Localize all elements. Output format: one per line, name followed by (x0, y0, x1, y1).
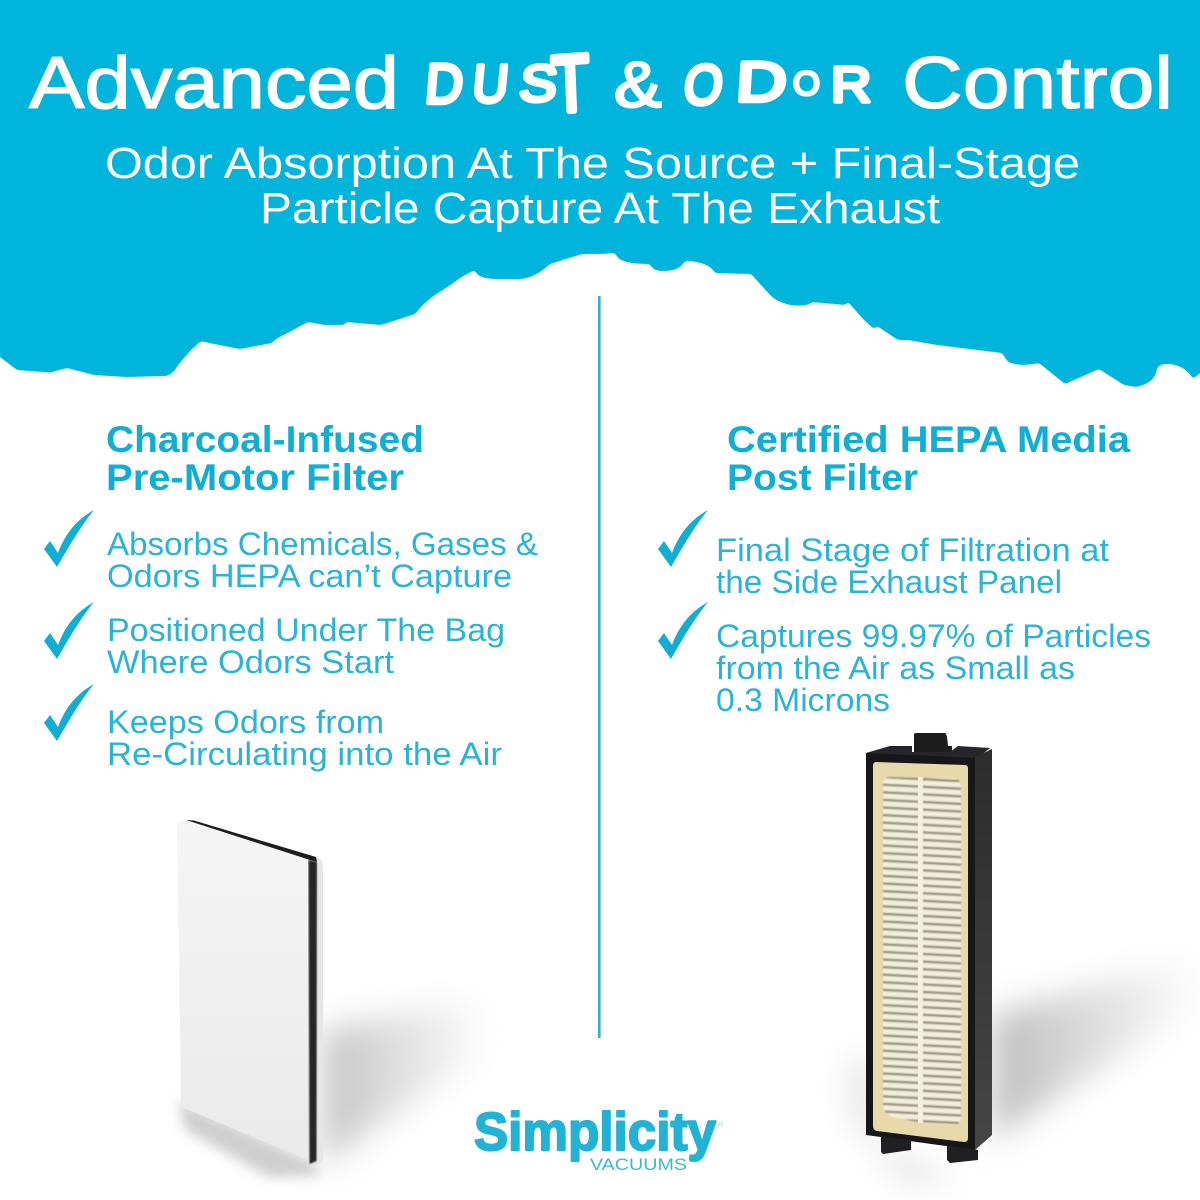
bullet text 3 (107, 704, 502, 772)
heading: HEPA filter: Certified HEPA Media (727, 419, 1130, 460)
heading: charcoal filter: Pre-Motor Filter (106, 457, 404, 498)
heading: charcoal filter (106, 419, 424, 498)
pleats left (883, 777, 918, 1122)
logo: Simplicity Vacuums: VACUUMS (590, 1155, 687, 1174)
handwritten words: odor: O (793, 65, 820, 103)
icon: check mark 3 (44, 684, 94, 741)
icon: check mark 4 (658, 510, 708, 567)
subtitle (105, 139, 1080, 233)
handwritten words: dust: D (423, 53, 466, 115)
handwritten words: odor: O (680, 54, 726, 117)
handwritten words: dust: U (470, 53, 511, 113)
bullet text 1: Absorbs Chemicals, Gases & (107, 526, 538, 562)
cream panel (873, 762, 968, 1142)
front frame (866, 753, 975, 1150)
bullet text 3: Keeps Odors from (107, 704, 384, 740)
handwritten words: dust: T (550, 39, 591, 130)
side panel (975, 749, 992, 1150)
handwritten words: dust: S (517, 55, 561, 112)
handwritten words: odor (680, 52, 871, 117)
panel: certified HEPA post filter (658, 419, 1200, 1180)
icon: check mark 1 (44, 510, 94, 567)
bullet text 3: Re-Circulating into the Air (107, 736, 502, 772)
title: Advanced (29, 43, 399, 124)
title: & (612, 47, 664, 123)
pleat divider (918, 777, 923, 1123)
bullet text 2: Positioned Under The Bag (107, 612, 505, 648)
illustration: HEPA cartridge filter (850, 733, 1200, 1180)
bullet text 1: Odors HEPA can’t Capture (107, 558, 512, 594)
handwritten words: odor: R (831, 58, 871, 113)
bullet text 5: Captures 99.97% of Particles (716, 618, 1151, 654)
bullet text 5: from the Air as Small as (716, 650, 1075, 686)
divider line (598, 296, 601, 1038)
bullet text 2 (107, 612, 505, 680)
title: Control (902, 43, 1173, 124)
illustration: foam charcoal filter (177, 820, 490, 1178)
banner: torn-edge blue header (0, 0, 1200, 387)
icon: check mark 5 (658, 602, 708, 659)
bullet text 4: Final Stage of Filtration at (716, 532, 1109, 568)
icon: check mark 2 (44, 602, 94, 659)
subtitle: Particle Capture At The Exhaust (260, 184, 940, 233)
bullet text 4 (716, 532, 1109, 600)
handwritten words: dust (423, 39, 591, 130)
logo: Simplicity Vacuums: ® (718, 1121, 724, 1129)
bullet text 5 (716, 618, 1151, 718)
logo: Simplicity Vacuums: Simplicity (474, 1102, 716, 1162)
title (29, 39, 1173, 130)
top face (866, 746, 990, 760)
tab (914, 733, 952, 760)
heading: HEPA filter (727, 419, 1130, 498)
heading: HEPA filter: Post Filter (727, 457, 918, 498)
panel: charcoal pre-motor filter (44, 419, 538, 1178)
heading: charcoal filter: Charcoal-Infused (106, 419, 424, 460)
bullet text 1 (107, 526, 538, 594)
bullet text 5: 0.3 Microns (716, 682, 890, 718)
handwritten words: odor: D (734, 52, 789, 113)
bullet text 2: Where Odors Start (107, 644, 394, 680)
bullet text 4: the Side Exhaust Panel (716, 564, 1062, 600)
pleats right (923, 778, 961, 1125)
feet (881, 1136, 911, 1154)
subtitle: Odor Absorption At The Source + Final-Stage (105, 139, 1080, 188)
